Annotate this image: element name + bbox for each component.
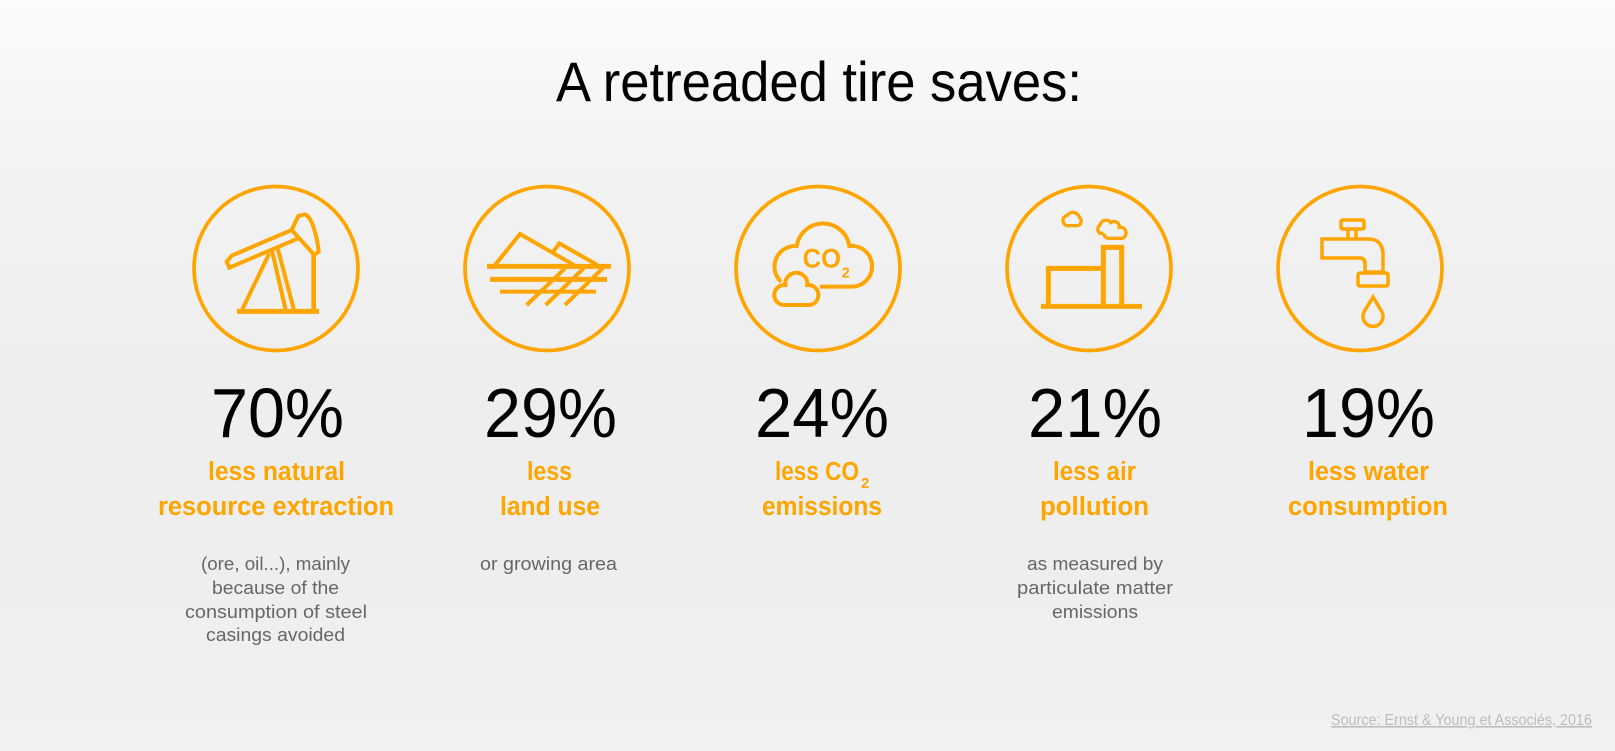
icon: faucet in circle	[1278, 186, 1442, 350]
icon: CO2 cloud in circle: CO	[803, 244, 841, 274]
stat: 70%: 70%	[211, 374, 344, 452]
title: A retreaded tire saves:	[556, 50, 1082, 113]
panel: CO2 emissions	[736, 186, 900, 521]
icon: factory in circle	[1007, 186, 1171, 350]
label: less natural resource extraction	[158, 458, 394, 521]
note: ore and oil	[185, 554, 367, 645]
note: ore and oil: because of the	[212, 578, 339, 598]
source credit: Source: Ernst & Young et Associés, 2016	[1331, 712, 1592, 729]
note: particulate matter: particulate matter	[1017, 578, 1173, 598]
label: less land use	[500, 458, 600, 521]
stat: 21%: 21%	[1028, 374, 1162, 452]
label: less land use: less	[527, 458, 572, 486]
note: or growing area: or growing area	[480, 554, 618, 574]
panel: air pollution	[1007, 186, 1173, 622]
label: less water consumption: consumption	[1288, 493, 1448, 521]
stat: 19%: 19%	[1302, 374, 1435, 452]
label: less CO2 emissions: less CO	[775, 458, 859, 486]
icon: land in circle	[465, 186, 629, 350]
note: particulate matter: as measured by	[1027, 554, 1163, 574]
label: less natural resource extraction: resource extraction	[158, 493, 394, 521]
label: less CO2 emissions	[762, 458, 882, 521]
note: particulate matter: emissions	[1052, 602, 1138, 622]
label: less air pollution	[1040, 458, 1149, 521]
note: ore and oil: consumption of steel	[185, 602, 367, 622]
icon: oil pump in circle	[194, 186, 358, 350]
panel: natural resource extraction	[158, 186, 394, 645]
stat: 24%: 24%	[755, 374, 889, 452]
label: less water consumption: less water	[1308, 458, 1429, 486]
label: less CO2 emissions: emissions	[762, 493, 882, 521]
label: less land use: land use	[500, 493, 600, 521]
icon: CO2 cloud in circle	[736, 186, 900, 350]
stat: 29%: 29%	[484, 374, 617, 452]
label: less water consumption	[1288, 458, 1448, 521]
icon: CO2 cloud in circle: 2	[842, 265, 850, 281]
note: particulate matter	[1017, 554, 1173, 622]
panel: land use	[465, 186, 629, 574]
note: ore and oil: casings avoided	[206, 625, 345, 645]
note: ore and oil: (ore, oil...), mainly	[201, 554, 350, 574]
label: less CO2 emissions: 2	[861, 475, 869, 492]
label: less air pollution: less air	[1053, 458, 1136, 486]
label: less natural resource extraction: less natural	[208, 458, 345, 486]
label: less air pollution: pollution	[1040, 493, 1149, 521]
panel: water consumption	[1278, 186, 1448, 521]
